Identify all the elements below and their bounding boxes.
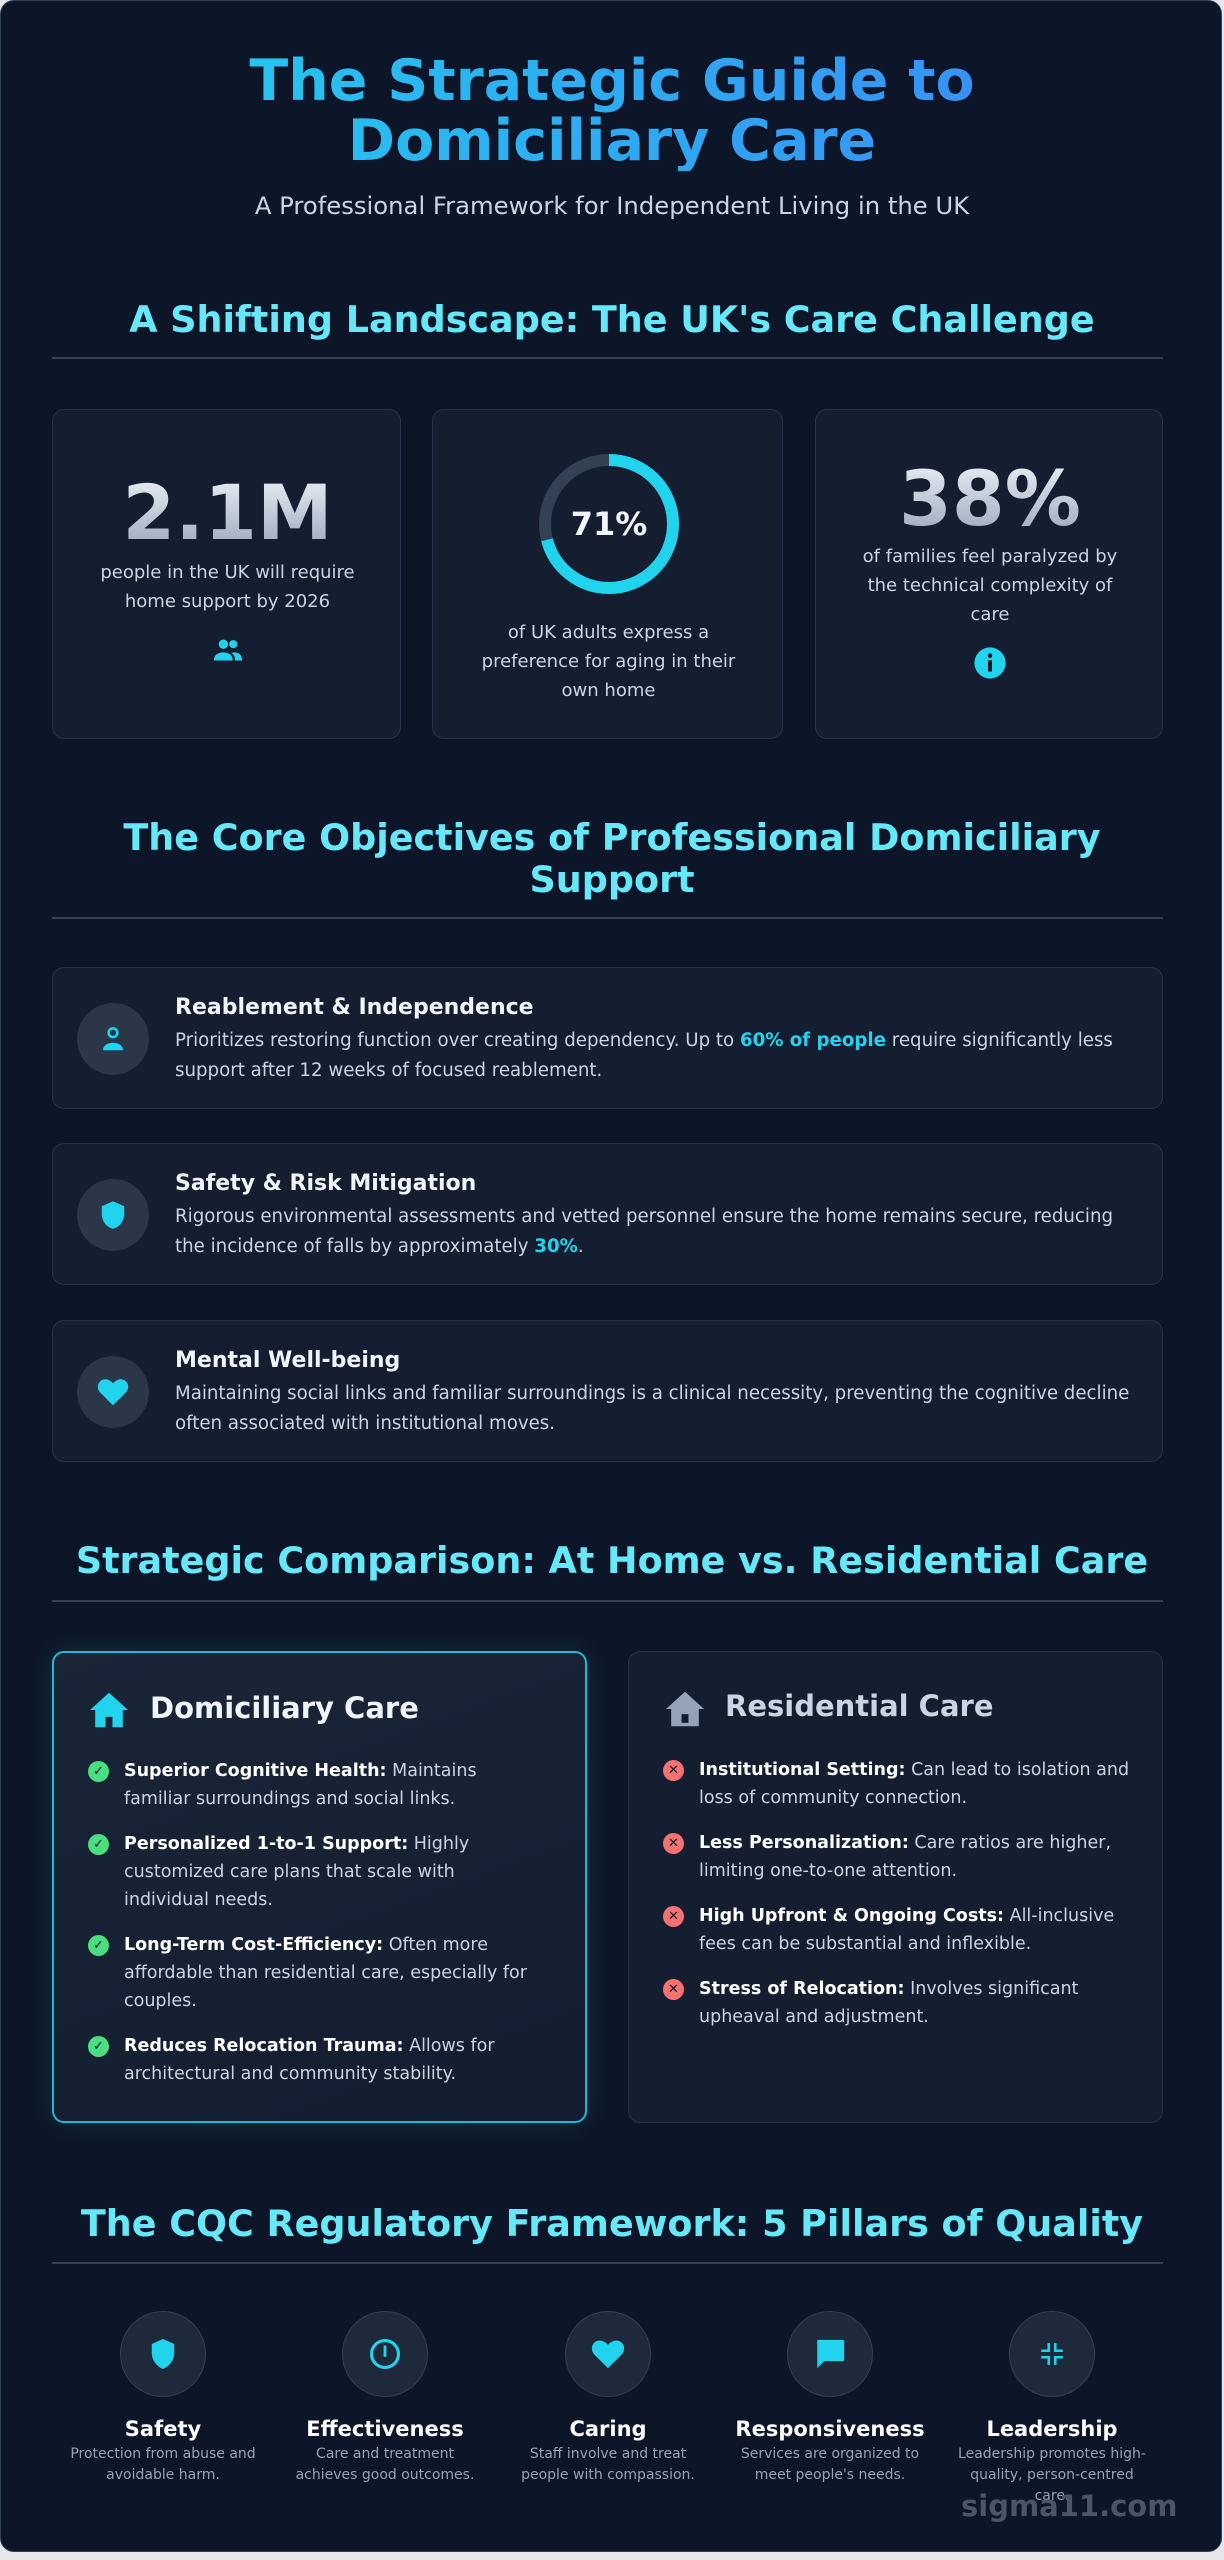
title: Domiciliary Care [348, 108, 876, 174]
icon: shield [77, 1179, 149, 1251]
pillar: caring [521, 2311, 695, 2483]
icon: info [974, 647, 1006, 679]
icon: house cyan [90, 1692, 128, 1728]
stat card: 2.1M [52, 409, 401, 739]
stat number: 38% [899, 454, 1081, 543]
panel: residential care: ✕ [668, 1982, 679, 1996]
pillar: effectiveness: Effectiveness [306, 2417, 464, 2441]
panel: residential care: ✕ [668, 1836, 679, 1850]
objective card: reablement [52, 967, 1163, 1109]
stat text: people in the UK will require home support by 2026 [100, 562, 355, 612]
pillar: caring: Caring [569, 2417, 647, 2441]
icon: compress [1009, 2311, 1095, 2397]
panel: domiciliary care [52, 1651, 587, 2123]
pillar: effectiveness: Care and treatment achieves good outcomes. [296, 2446, 474, 2483]
con item 1: Institutional Setting: Can lead to isolation and loss of community connection. [699, 1760, 1129, 1808]
pro item 1: Superior Cognitive Health: Maintains familiar surroundings and social links. [124, 1761, 477, 1809]
title [1, 51, 1223, 171]
pillar: safety: Protection from abuse and avoidable harm. [70, 2446, 256, 2483]
stat number [816, 454, 1164, 543]
panel: residential care [628, 1651, 1163, 2123]
icon: power circle [342, 2311, 428, 2397]
subtitle: A Professional Framework for Independent Living in the UK [255, 191, 969, 220]
panel: domiciliary care: ✓ [93, 2038, 104, 2054]
watermark: sigma11.com [961, 2489, 1177, 2523]
pillar: safety [70, 2311, 256, 2483]
heading: strategic comparison: Strategic Comparison: At Home vs. Residential Care [76, 1539, 1148, 1582]
title: The Strategic Guide to [249, 48, 975, 114]
panel: domiciliary care: ✓ [93, 1836, 104, 1852]
heading: core objectives: Support [529, 858, 695, 901]
con item 2: Less Personalization: Care ratios are higher, limiting one-to-one attention. [699, 1833, 1111, 1881]
icon: shield [120, 2311, 206, 2397]
pillar: leadership: Leadership [986, 2417, 1118, 2441]
objective text: Maintaining social links and familiar surroundings is a clinical necessity, preventing the cognitive decline often associated with institutional moves. [175, 1383, 1129, 1434]
objective card: safety [52, 1143, 1163, 1285]
stat number: 2.1M [122, 468, 333, 557]
donut chart [539, 454, 679, 594]
con item 4: Stress of Relocation: Involves significant upheaval and adjustment. [699, 1979, 1078, 2027]
pro item 3: Long-Term Cost-Efficiency: Often more affordable than residential care, especially for couples. [124, 1935, 527, 2011]
panel: residential care: ✕ [668, 1908, 679, 1924]
stat text: of UK adults express a preference for aging in their own home [482, 622, 735, 701]
pillar: responsiveness: Responsiveness [735, 2417, 925, 2441]
objective card: mental well-being [52, 1320, 1163, 1462]
icon: heart [565, 2311, 651, 2397]
stat card: 38% [815, 409, 1163, 739]
heading: core objectives: The Core Objectives of Professional Domiciliary [123, 816, 1101, 859]
stat card: 71% donut [432, 409, 783, 739]
con item 3: High Upfront & Ongoing Costs: All-inclusive fees can be substantial and inflexible. [699, 1906, 1114, 1954]
icon: person [77, 1003, 149, 1075]
objective text: Prioritizes restoring function over creating dependency. Up to 60% of people require significantly less support after 12 weeks of focused reablement. [175, 1030, 1113, 1081]
objective title: Reablement & Independence [175, 995, 534, 1020]
heading: shifting landscape: A Shifting Landscape: The UK's Care Challenge [129, 298, 1095, 341]
panel: domiciliary care: ✓ [93, 1764, 104, 1778]
heading: core objectives [123, 816, 1101, 901]
heading: CQC framework: The CQC Regulatory Framework: 5 Pillars of Quality [81, 2202, 1143, 2245]
stat text: of families feel paralyzed by the technical complexity of care [863, 546, 1117, 625]
pillar: responsiveness: Services are organized to meet people's needs. [741, 2446, 919, 2483]
icon: chat [787, 2311, 873, 2397]
stat number [53, 468, 402, 557]
pro item 4: Reduces Relocation Trauma: Allows for architectural and community stability. [124, 2036, 495, 2084]
pillar: effectiveness [296, 2311, 474, 2483]
panel title: Residential Care [725, 1689, 994, 1723]
objective title: Safety & Risk Mitigation [175, 1171, 476, 1196]
panel: domiciliary care: ✓ [93, 1938, 104, 1952]
pro item 2: Personalized 1-to-1 Support: Highly customized care plans that scale with individual needs. [124, 1834, 469, 1910]
pillar: leadership [958, 2311, 1146, 2504]
pillar: leadership: Leadership promotes high-quality, person-centred care. [958, 2446, 1146, 2504]
objective title: Mental Well-being [175, 1348, 400, 1373]
icon: people [214, 640, 242, 660]
panel: residential care: ✕ [668, 1762, 679, 1778]
panel title: Domiciliary Care [150, 1691, 419, 1725]
donut chart: 71% [571, 505, 647, 543]
pillar: safety: Safety [125, 2417, 201, 2441]
pillar: responsiveness [735, 2311, 925, 2483]
icon: house gray [666, 1692, 704, 1726]
icon: heart [77, 1356, 149, 1428]
objective text: Rigorous environmental assessments and vetted personnel ensure the home remains secure, reducing the incidence of falls by approximately 30%. [175, 1206, 1113, 1257]
pillar: caring: Staff involve and treat people with compassion. [521, 2446, 695, 2483]
